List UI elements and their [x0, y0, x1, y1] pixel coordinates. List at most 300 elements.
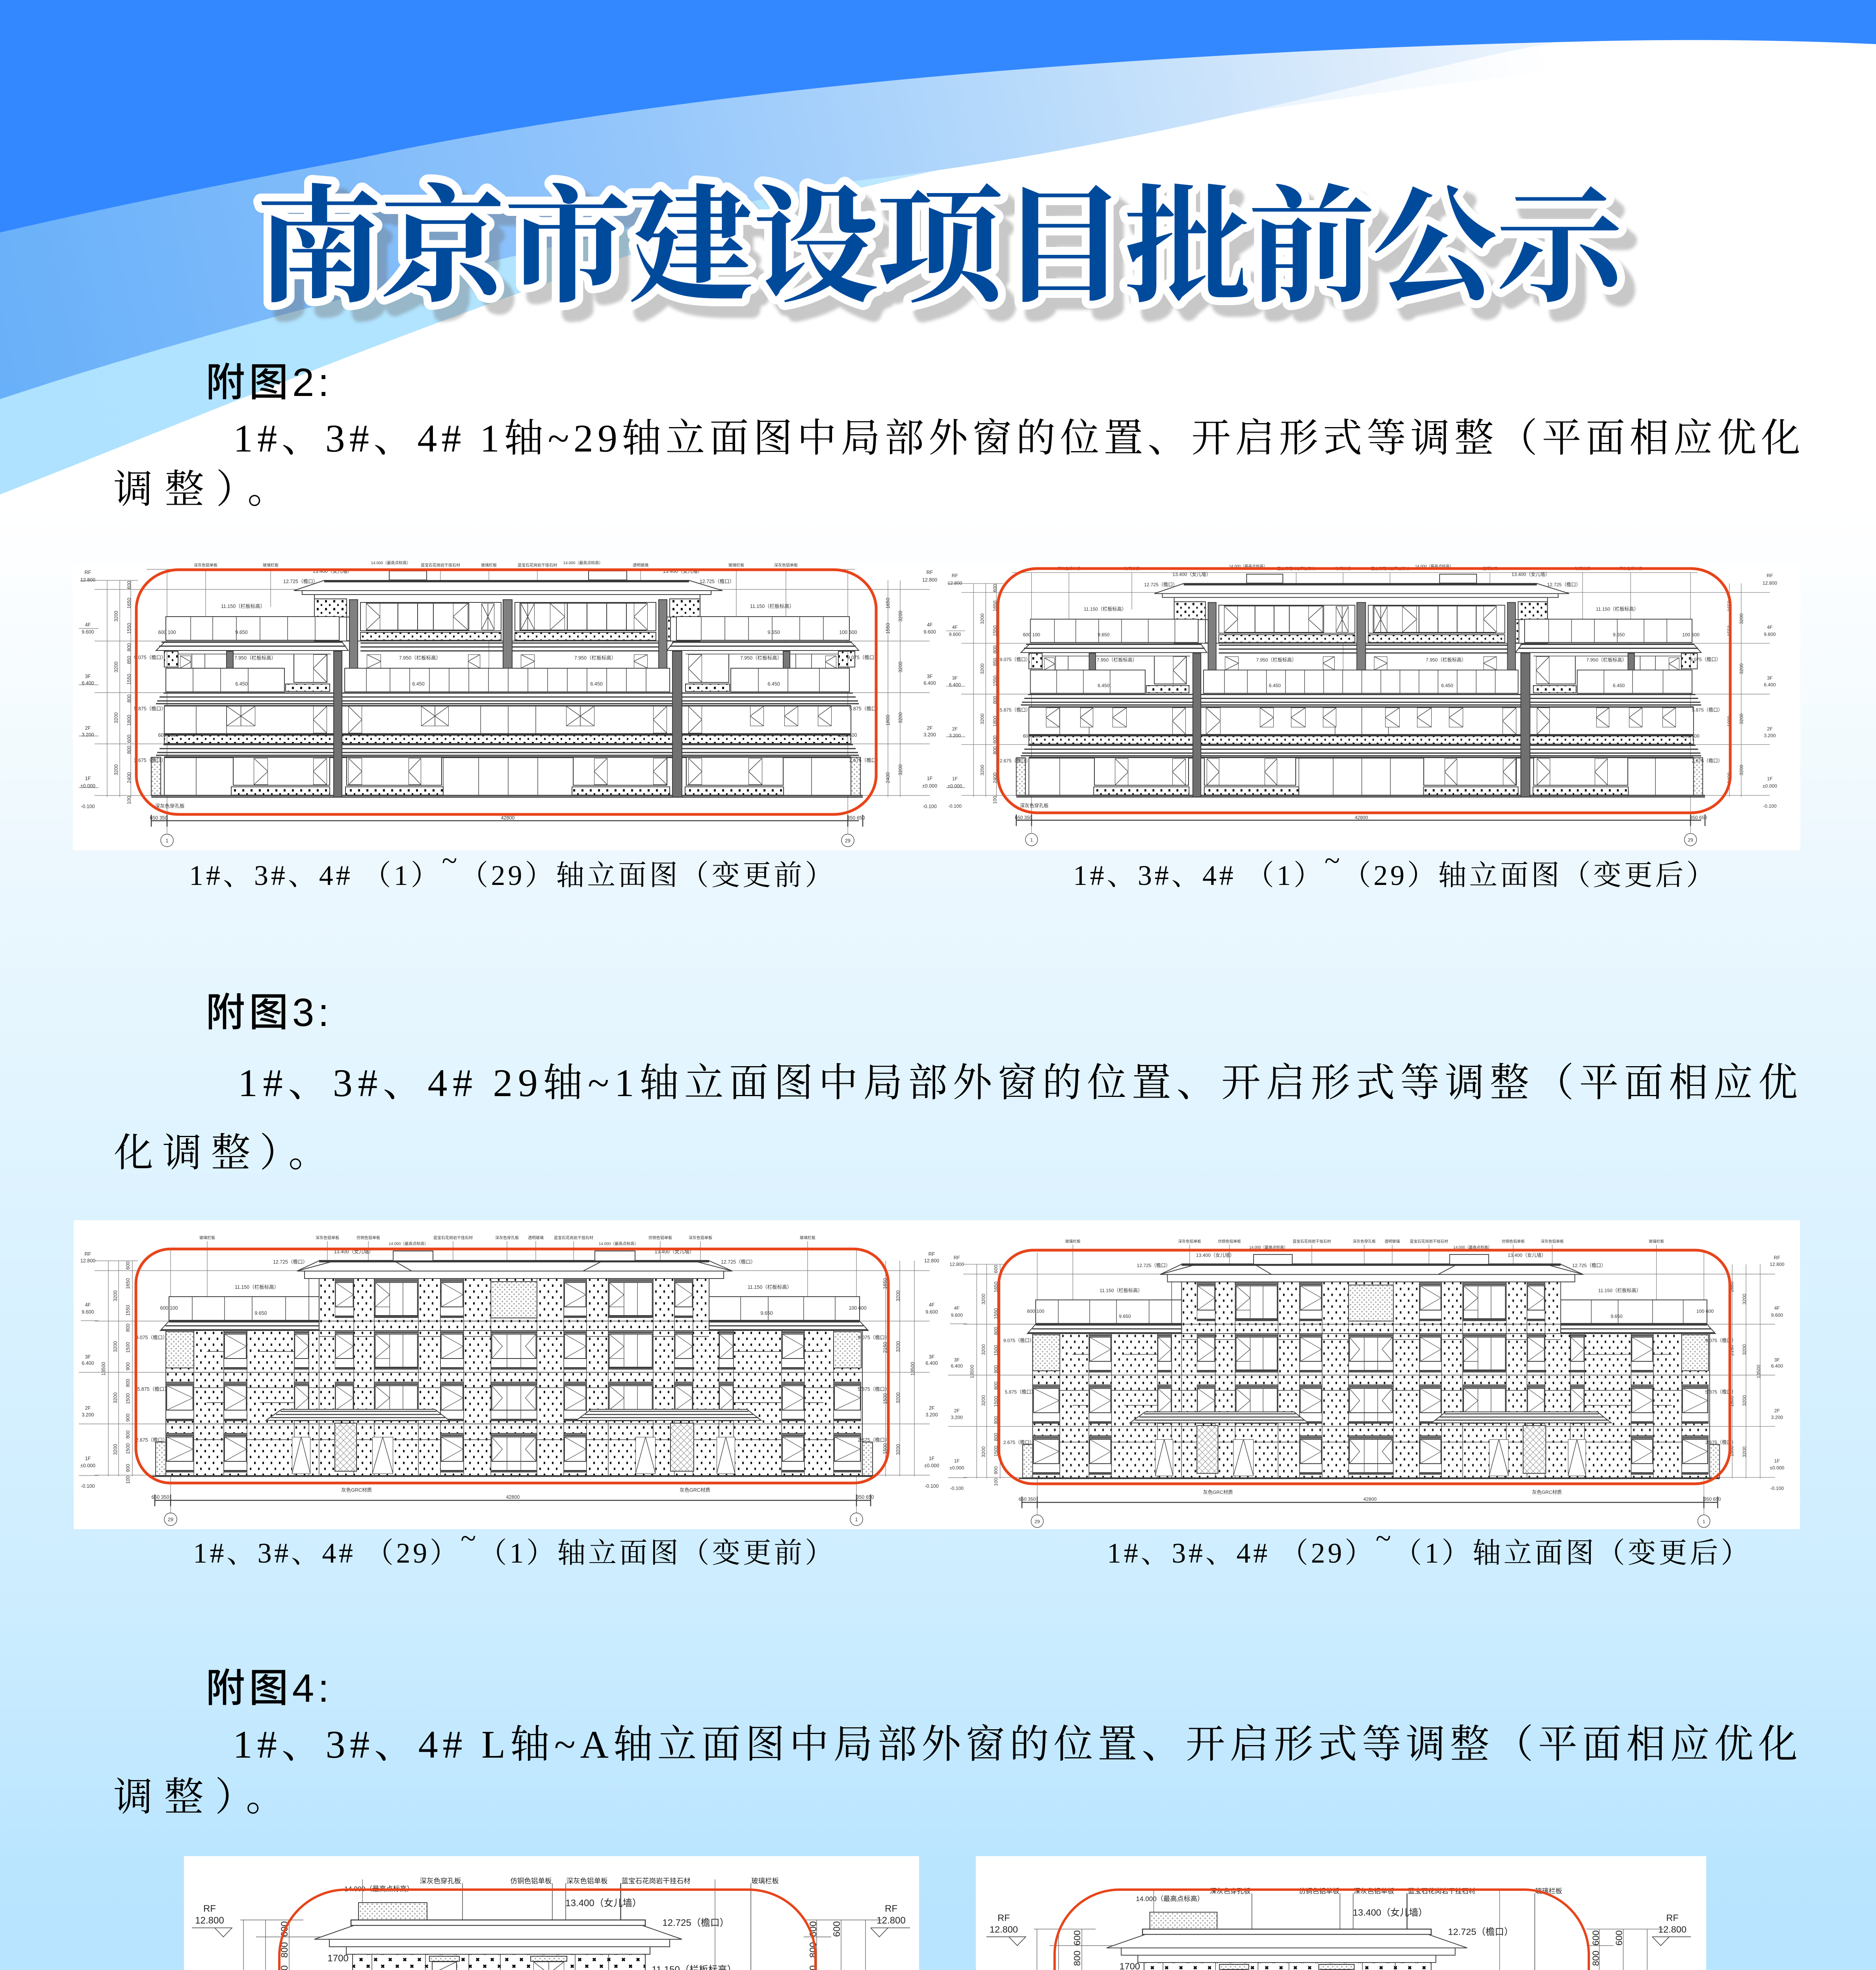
- drawing annotations: 1: [1703, 1519, 1705, 1524]
- drawing annotations: 1700: [327, 1953, 349, 1964]
- caption: before: （29）轴立面图（变更前）: [460, 860, 833, 891]
- drawing annotations: 3F: [1767, 675, 1773, 681]
- drawing annotations: 14.000（最高点标高）: [389, 1241, 428, 1246]
- drawing annotations: 3200: [1739, 613, 1744, 624]
- drawing annotations: 玻璃栏板: [1649, 1239, 1664, 1244]
- drawing annotations: 3200: [1739, 663, 1744, 674]
- drawing annotations: -0.100: [923, 804, 937, 809]
- drawing annotations: 3.200: [1764, 733, 1776, 738]
- drawing annotations: 1650: [992, 600, 997, 611]
- drawing annotations: 42800: [1363, 1496, 1377, 1502]
- drawing annotations: 1650: [882, 1278, 888, 1289]
- drawing annotations: 蓝宝石花岗岩干挂石材: [433, 1235, 473, 1240]
- drawing annotations: 100 600: [839, 630, 857, 635]
- drawing annotations: 9.650: [760, 1310, 773, 1316]
- drawing annotations: 1650: [1727, 600, 1732, 611]
- panel: 附图2 white drawing background: [73, 564, 1800, 850]
- drawing annotations: 600 100: [1023, 632, 1040, 637]
- drawing annotations: 3F: [929, 1354, 935, 1360]
- drawing annotations: 3200: [980, 613, 985, 624]
- drawing annotations: 11.150（栏板标高）: [1598, 1287, 1641, 1293]
- section 附图2 description: 调整）。: [113, 468, 287, 511]
- drawing annotations: 11.150（栏板标高）: [1596, 606, 1639, 612]
- drawing annotations: -0.100: [950, 1485, 964, 1491]
- panel: 附图4 before white drawing background: [184, 1856, 919, 1970]
- drawing annotations: 9.600: [951, 1312, 963, 1318]
- drawing annotations: 3200: [1742, 1344, 1747, 1355]
- drawing annotations: 9.600: [1771, 1312, 1783, 1318]
- drawing annotations: 玻璃栏板: [1575, 566, 1590, 571]
- drawing annotations: 350 650: [1704, 1496, 1721, 1502]
- drawing annotations: 6.450: [1613, 683, 1625, 688]
- drawing annotations: 玻璃栏板: [199, 1235, 215, 1240]
- drawing annotations: 600: [1614, 1930, 1624, 1946]
- drawing annotations: 1800: [992, 716, 997, 727]
- drawing annotations: 3200: [980, 663, 985, 674]
- drawing annotations: 深灰色铝单板: [1541, 1239, 1564, 1244]
- drawing annotations: 900: [993, 1416, 999, 1424]
- drawing annotations: 6.450: [1441, 683, 1453, 688]
- section 附图4 description: [113, 1723, 1798, 1819]
- drawing annotations: RF: [885, 1903, 897, 1914]
- drawing: L-A elevation after change: [986, 1888, 1691, 1970]
- drawing annotations: 9.650: [1610, 1314, 1623, 1319]
- drawing annotations: 3200: [898, 712, 903, 723]
- drawing annotations: 12.725（檐口）: [283, 579, 318, 584]
- drawing annotations: 600: [993, 1265, 999, 1273]
- drawing annotations: 900: [993, 1365, 999, 1373]
- drawing annotations: 3F: [927, 674, 933, 679]
- drawing annotations: 9.650: [254, 1310, 267, 1316]
- drawing annotations: 3F: [954, 1357, 960, 1362]
- drawing annotations: 11.150（栏板标高）: [1084, 606, 1127, 612]
- drawing annotations: 800: [125, 1379, 131, 1387]
- drawing annotations: 13.400（女儿墙）: [1508, 1252, 1546, 1258]
- drawing annotations: 2.675（檐口）: [134, 758, 166, 763]
- drawing annotations: RF: [85, 1251, 91, 1257]
- caption: after: ~: [1324, 845, 1340, 876]
- drawing annotations: 1500: [1729, 1396, 1735, 1407]
- drawing annotations: 100 600: [839, 732, 857, 738]
- drawing annotations: 800: [808, 1942, 819, 1958]
- section 附图2 heading: 附图2:: [206, 361, 329, 405]
- drawing annotations: 600 100: [160, 1305, 178, 1311]
- drawing annotations: [990, 1888, 1687, 1970]
- drawing annotations: [195, 1877, 906, 1970]
- drawing annotations: 1500: [125, 1342, 131, 1353]
- drawing annotations: 透明玻璃: [1482, 566, 1498, 571]
- drawing annotations: 1500: [1729, 1446, 1735, 1457]
- drawing annotations: 1550: [126, 623, 132, 634]
- drawing annotations: 850: [126, 656, 132, 664]
- drawing annotations: 仿铜色铝单板: [1502, 1239, 1525, 1244]
- drawing annotations: 2.675（檐口）: [1705, 1440, 1736, 1445]
- drawing annotations: 5.875（檐口）: [858, 1386, 890, 1392]
- drawing annotations: 1500: [125, 1443, 131, 1454]
- drawing annotations: 100 600: [1682, 733, 1700, 739]
- drawing: 1-29 elevation after change: [946, 563, 1777, 846]
- drawing annotations: 29: [1688, 837, 1693, 843]
- drawing annotations: 2.675（檐口）: [1692, 758, 1723, 764]
- caption: after: （1）轴立面图（变更后）: [1394, 1537, 1749, 1569]
- drawing annotations: 600: [125, 1262, 131, 1269]
- drawing annotations: 6.400: [925, 1360, 938, 1366]
- drawing annotations: 800: [993, 1327, 999, 1335]
- drawing annotations: 4F: [1767, 624, 1773, 630]
- drawing annotations: 11.150（栏板标高）: [750, 603, 794, 609]
- caption: before: 1#、3#、4# （1）: [189, 860, 439, 891]
- drawing annotations: 42800: [501, 815, 515, 821]
- drawing annotations: 800: [126, 643, 132, 651]
- drawing annotations: 仿铜色铝单板: [648, 1235, 672, 1240]
- drawing annotations: 14.000（最高点标高）: [1453, 1245, 1492, 1250]
- drawing annotations: 深灰色穿孔板: [420, 1877, 461, 1885]
- drawing annotations: 3200: [1742, 1395, 1747, 1406]
- drawing annotations: 3200: [981, 1395, 986, 1406]
- drawing annotations: 14.000（最高点标高）: [1415, 563, 1453, 569]
- drawing annotations: 9.600: [82, 629, 94, 635]
- drawing annotations: 6.400: [82, 680, 94, 686]
- drawing annotations: RF: [929, 1251, 935, 1257]
- drawing annotations: 13500: [101, 1362, 106, 1375]
- caption: after: ~: [1376, 1522, 1391, 1554]
- drawing annotations: 7.950（栏板标高）: [574, 655, 616, 661]
- caption: after: （29）轴立面图（变更后）: [1343, 860, 1714, 891]
- drawing annotations: 650 350: [1015, 815, 1032, 820]
- drawing annotations: 玻璃栏板: [1124, 566, 1140, 571]
- drawing annotations: 2F: [929, 1405, 935, 1411]
- drawing annotations: 12.725（檐口）: [1547, 582, 1581, 587]
- drawing annotations: 12.800: [922, 577, 937, 583]
- drawing annotations: 12.725（檐口）: [700, 579, 734, 584]
- drawing annotations: 3200: [895, 1444, 901, 1455]
- drawing annotations: -0.100: [81, 1483, 95, 1489]
- drawing annotations: 600: [832, 1921, 842, 1937]
- drawing annotations: 6.400: [949, 682, 961, 688]
- drawing annotations: 6.450: [767, 681, 780, 687]
- drawing annotations: 3F: [952, 675, 958, 681]
- drawing annotations: 深灰色铝单板: [316, 1235, 339, 1240]
- drawing annotations: 5.875（檐口）: [1692, 707, 1723, 713]
- drawing annotations: 仿铜色铝单板: [1218, 1239, 1241, 1244]
- drawing annotations: 6.400: [1764, 682, 1776, 688]
- drawing annotations: 蓝宝石花岗岩干挂石材: [421, 563, 460, 568]
- drawing annotations: 6.400: [82, 1360, 94, 1366]
- drawing annotations: 850: [992, 658, 997, 666]
- drawing annotations: 13.400（女儿墙）: [655, 1249, 694, 1254]
- drawing annotations: 2150: [1729, 1345, 1735, 1356]
- drawing annotations: 3F: [85, 1354, 91, 1360]
- drawing annotations: 800: [993, 1381, 999, 1390]
- drawing annotations: 玻璃栏板: [800, 1235, 815, 1240]
- drawing annotations: 12.725（檐口）: [1448, 1927, 1514, 1937]
- drawing annotations: 2F: [1767, 726, 1773, 732]
- drawing annotations: 12.800: [877, 1915, 906, 1926]
- drawing annotations: 600: [1591, 1930, 1601, 1946]
- drawing annotations: 800: [125, 1431, 131, 1438]
- drawing annotations: 11.150（栏板标高）: [235, 1284, 279, 1290]
- drawing annotations: 2F: [1774, 1408, 1780, 1414]
- drawing annotations: 6.450: [1098, 683, 1110, 688]
- drawing annotations: ±0.000: [947, 783, 962, 789]
- drawing annotations: 5.875（檐口）: [137, 1386, 169, 1392]
- drawing annotations: 13500: [970, 1365, 975, 1378]
- drawing annotations: 透明玻璃: [1384, 1239, 1400, 1244]
- drawing annotations: 2.675（檐口）: [849, 758, 881, 763]
- drawing annotations: 5.875（檐口）: [134, 706, 166, 712]
- drawing annotations: 1550: [993, 1308, 999, 1319]
- drawing annotations: 14.000（最高点标高）: [1249, 1245, 1288, 1250]
- drawing annotations: 7.950（栏板标高）: [1097, 657, 1137, 663]
- drawing annotations: 800: [1072, 1951, 1082, 1966]
- drawing annotations: 2400: [885, 772, 891, 783]
- drawing: 29-1 elevation after change: [948, 1239, 1785, 1528]
- drawing annotations: 3200: [898, 764, 903, 775]
- drawing annotations: 3200: [895, 1341, 901, 1352]
- drawing annotations: 1650: [1729, 1281, 1735, 1292]
- drawing annotations: 灰色GRC材质: [680, 1487, 710, 1493]
- drawing annotations: [80, 1235, 939, 1522]
- drawing annotations: 深灰色铝单板: [1057, 566, 1081, 571]
- drawing annotations: 3200: [113, 1392, 118, 1403]
- drawing annotations: 12.725（檐口）: [662, 1918, 729, 1928]
- drawing annotations: 1F: [952, 776, 958, 781]
- drawing annotations: 3.200: [949, 733, 961, 738]
- drawing annotations: 1: [166, 838, 169, 844]
- drawing annotations: 9.075（檐口）: [1003, 1338, 1035, 1344]
- drawing annotations: 3200: [981, 1344, 986, 1355]
- drawing annotations: 12.800: [195, 1915, 224, 1926]
- drawing annotations: 350 650: [856, 1494, 874, 1500]
- caption: before: （1）轴立面图（变更前）: [479, 1537, 833, 1569]
- drawing annotations: 800: [126, 746, 132, 754]
- drawing annotations: 2400: [126, 772, 132, 783]
- drawing annotations: 350 650: [1690, 815, 1707, 820]
- red outline: after change area: [999, 1250, 1730, 1484]
- drawing annotations: 600: [126, 581, 132, 589]
- drawing annotations: 12.800: [947, 580, 962, 586]
- drawing annotations: 2400: [1727, 772, 1732, 783]
- drawing annotations: 深灰色穿孔板: [155, 803, 185, 809]
- drawing annotations: RF: [203, 1903, 216, 1914]
- drawing annotations: 4F: [85, 1302, 91, 1308]
- drawing annotations: 6.400: [951, 1363, 963, 1369]
- drawing annotations: 3200: [1739, 714, 1744, 724]
- drawing annotations: 100 600: [849, 1305, 867, 1311]
- drawing annotations: 蓝宝石花岗岩干挂石材: [1408, 1888, 1475, 1895]
- drawing annotations: 7.950（栏板标高）: [1586, 657, 1627, 663]
- drawing annotations: 深灰色铝单板: [1619, 566, 1642, 571]
- caption: before: ~: [461, 1522, 476, 1554]
- drawing annotations: 3200: [113, 662, 119, 673]
- drawing annotations: 仿铜色铝单板: [511, 1877, 552, 1885]
- drawing annotations: 6.400: [923, 680, 936, 686]
- drawing annotations: 1650: [125, 1278, 131, 1289]
- drawing annotations: 深灰色穿孔板: [1020, 803, 1048, 808]
- red outline: after change area: [998, 569, 1730, 813]
- drawing annotations: 蓝宝石花岗岩干挂石材: [622, 1877, 690, 1885]
- drawing annotations: 7.950（栏板标高）: [1256, 657, 1296, 663]
- drawing annotations: ±0.000: [924, 1463, 939, 1468]
- drawing annotations: 14.000（最高点标高）: [371, 560, 410, 565]
- drawing annotations: 9.650: [1098, 632, 1110, 637]
- red outline: after change area: [1055, 1890, 1589, 1970]
- drawing annotations: 蓝宝石花岗岩干挂石材: [554, 1235, 593, 1240]
- drawing annotations: 29: [845, 838, 851, 844]
- drawing annotations: 1500: [993, 1345, 999, 1356]
- drawing annotations: 42800: [506, 1494, 520, 1500]
- drawing annotations: 100 600: [1696, 1308, 1714, 1314]
- drawing annotations: 6.450: [235, 681, 248, 687]
- caption: before: ~: [442, 845, 457, 876]
- drawing annotations: 100 600: [1682, 632, 1700, 637]
- section 附图2 description: 1#、3#、4# 1轴~29轴立面图中局部外窗的位置、开启形式等调整（平面相应优化: [233, 416, 1800, 460]
- drawing annotations: 3F: [1774, 1357, 1780, 1362]
- drawing annotations: 12.725（檐口）: [1137, 1263, 1170, 1268]
- drawing annotations: 深灰色铝单板: [1178, 1239, 1201, 1244]
- drawing annotations: 14.000（最高点标高）: [1229, 563, 1267, 569]
- drawing annotations: 600: [992, 735, 997, 743]
- drawing annotations: 3F: [85, 674, 91, 679]
- drawing annotations: 9.075（檐口）: [1000, 657, 1031, 662]
- drawing annotations: 600: [808, 1921, 819, 1937]
- drawing annotations: 1F: [954, 1458, 960, 1464]
- top decorative sweep: [0, 0, 1876, 494]
- windows after change: [1046, 708, 1676, 785]
- drawing annotations: 800: [993, 1433, 999, 1441]
- drawing annotations: 深灰色铝单板: [567, 1877, 607, 1885]
- drawing annotations: 1: [855, 1517, 858, 1522]
- drawing annotations: 1800: [126, 715, 132, 726]
- drawing annotations: 14.000（最高点标高）: [563, 560, 603, 565]
- drawing annotations: 灰色GRC材质: [341, 1487, 372, 1493]
- drawing annotations: 4F: [1774, 1305, 1780, 1311]
- drawing annotations: 2150: [882, 1342, 888, 1353]
- drawing annotations: 深灰色铝单板: [194, 563, 217, 568]
- caption: after: 1#、3#、4# （1）: [1073, 860, 1322, 891]
- drawing annotations: 玻璃栏板: [1065, 1239, 1081, 1244]
- drawing annotations: 5.875（檐口）: [849, 706, 881, 712]
- drawing annotations: 9.650: [767, 630, 780, 635]
- red outline: before change area: [136, 1249, 888, 1483]
- drawing annotations: 2F: [952, 726, 958, 732]
- drawing annotations: 29: [168, 1517, 173, 1522]
- drawing annotations: 3200: [898, 662, 903, 673]
- drawing annotations: 9.075（檐口）: [847, 655, 879, 660]
- drawing annotations: 900: [125, 1362, 131, 1370]
- drawing annotations: RF: [1766, 573, 1773, 578]
- drawing annotations: 深灰色穿孔板: [1353, 1239, 1376, 1244]
- drawing annotations: 9.600: [949, 632, 961, 637]
- windows: [227, 706, 832, 785]
- drawing annotations: 1800: [885, 715, 891, 726]
- drawing annotations: 1F: [929, 1456, 935, 1461]
- drawing annotations: RF: [952, 573, 958, 578]
- drawing annotations: 5.875（檐口）: [1705, 1389, 1736, 1395]
- red outline: before change area: [136, 570, 876, 814]
- drawing annotations: 3.200: [923, 732, 936, 738]
- drawing annotations: 3.200: [82, 1412, 94, 1418]
- drawing annotations: 1550: [992, 625, 997, 636]
- drawing annotations: 1550: [1727, 625, 1732, 636]
- drawing annotations: 2F: [85, 1405, 91, 1411]
- drawing annotations: 蓝宝石花岗岩干挂石材: [1410, 1239, 1448, 1244]
- drawing annotations: 600: [279, 1921, 290, 1937]
- drawing annotations: 1F: [85, 776, 91, 781]
- drawing annotations: 灰色GRC材质: [1203, 1489, 1233, 1495]
- drawing annotations: 13.400（女儿墙）: [663, 568, 702, 574]
- drawing annotations: 9.650: [235, 630, 248, 635]
- drawing annotations: 蓝宝石花岗岩干挂石材: [1277, 566, 1315, 571]
- drawing annotations: 350 650: [847, 815, 865, 821]
- drawing annotations: 2F: [85, 725, 91, 731]
- drawing annotations: [80, 560, 937, 844]
- section 附图3 description: 化调整）。: [114, 1131, 328, 1175]
- drawing annotations: 13.400（女儿墙）: [313, 568, 352, 574]
- drawing annotations: 3200: [113, 1444, 118, 1455]
- drawing annotations: 12.800: [80, 577, 95, 583]
- drawing annotations: 12.800: [924, 1258, 939, 1264]
- drawing annotations: 3200: [980, 765, 985, 775]
- drawing annotations: 蓝宝石花岗岩干挂石材: [1293, 1239, 1331, 1244]
- drawing annotations: 玻璃栏板: [1535, 1888, 1562, 1895]
- drawing annotations: 深灰色铝单板: [774, 563, 798, 568]
- drawing annotations: 蓝宝石花岗岩干挂石材: [518, 563, 557, 568]
- drawing annotations: 12.800: [1770, 1262, 1785, 1267]
- drawing annotations: 13.400（女儿墙）: [1512, 571, 1550, 577]
- drawing annotations: 5.875（檐口）: [1000, 707, 1031, 713]
- drawing annotations: 12.725（檐口）: [1572, 1263, 1606, 1268]
- drawing annotations: 玻璃栏板: [481, 563, 497, 568]
- drawing annotations: 13500: [1756, 1365, 1761, 1378]
- drawing annotations: 650 350: [151, 1494, 169, 1500]
- section 附图3 description: 1#、3#、4# 29轴~1轴立面图中局部外窗的位置、开启形式等调整（平面相应优: [238, 1061, 1798, 1105]
- drawing annotations: 2F: [927, 725, 933, 731]
- drawing annotations: 4F: [952, 624, 958, 630]
- drawing annotations: 4F: [85, 622, 91, 628]
- drawing annotations: 深灰色穿孔板: [495, 1235, 519, 1240]
- drawing annotations: 900: [125, 1414, 131, 1422]
- drawing annotations: 13.400（女儿墙）: [1196, 1252, 1235, 1258]
- drawing annotations: 3200: [981, 1446, 986, 1457]
- drawing annotations: ±0.000: [1763, 783, 1777, 789]
- drawing annotations: 1550: [885, 623, 891, 634]
- drawing annotations: 1650: [993, 1281, 999, 1292]
- drawing annotations: 3.200: [925, 1412, 938, 1418]
- drawing: L-A elevation before change: [192, 1877, 910, 1970]
- drawing annotations: 深灰色铝单板: [1354, 1888, 1394, 1895]
- drawing annotations: 2.675（檐口）: [136, 1437, 168, 1443]
- drawing annotations: 600 100: [1027, 1308, 1044, 1314]
- drawing annotations: 600 100: [158, 630, 176, 635]
- drawing annotations: 3200: [1742, 1294, 1747, 1305]
- drawing annotations: 1550: [126, 674, 132, 685]
- drawing annotations: [949, 1239, 1785, 1524]
- drawing annotations: 9.600: [82, 1309, 94, 1315]
- red outline: before change area: [279, 1890, 815, 1970]
- drawing annotations: 600 100: [1023, 733, 1040, 739]
- drawing annotations: ±0.000: [80, 1463, 95, 1468]
- drawing annotations: 900: [993, 1466, 999, 1474]
- drawing annotations: 900: [125, 1464, 131, 1472]
- caption: after: 1#、3#、4# （29）: [1107, 1537, 1373, 1569]
- drawing annotations: 4F: [954, 1305, 960, 1311]
- drawing annotations: 6.450: [590, 681, 603, 687]
- drawing annotations: 6.450: [412, 681, 425, 687]
- drawing annotations: 7.950（栏板标高）: [740, 655, 782, 661]
- drawing annotations: 1F: [85, 1456, 91, 1461]
- drawing annotations: 12.800: [1763, 580, 1777, 586]
